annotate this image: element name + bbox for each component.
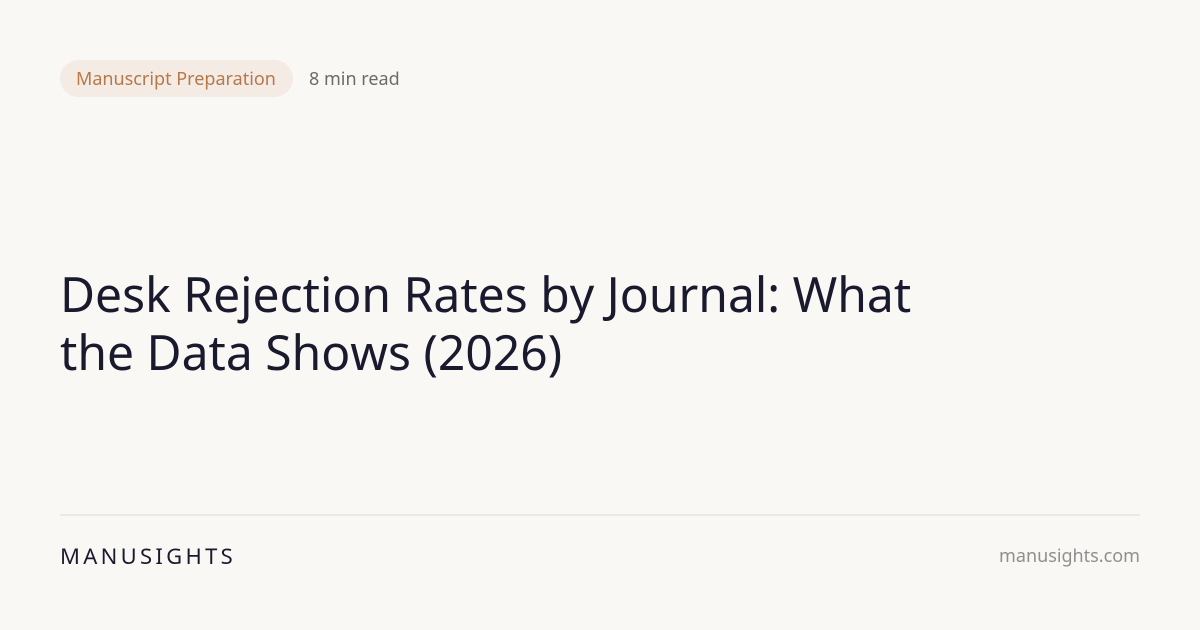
title: the Data Shows (2026) bbox=[60, 320, 562, 385]
divider bbox=[60, 514, 1140, 516]
read time: 8 min read bbox=[309, 67, 400, 91]
brand name: MANUSIGHTS bbox=[60, 541, 236, 571]
title: Desk Rejection Rates by Journal: What bbox=[60, 262, 911, 327]
website url: manusights.com bbox=[999, 544, 1140, 568]
category pill bbox=[60, 60, 293, 97]
category label: Manuscript Preparation bbox=[76, 67, 276, 91]
title bbox=[60, 262, 911, 385]
